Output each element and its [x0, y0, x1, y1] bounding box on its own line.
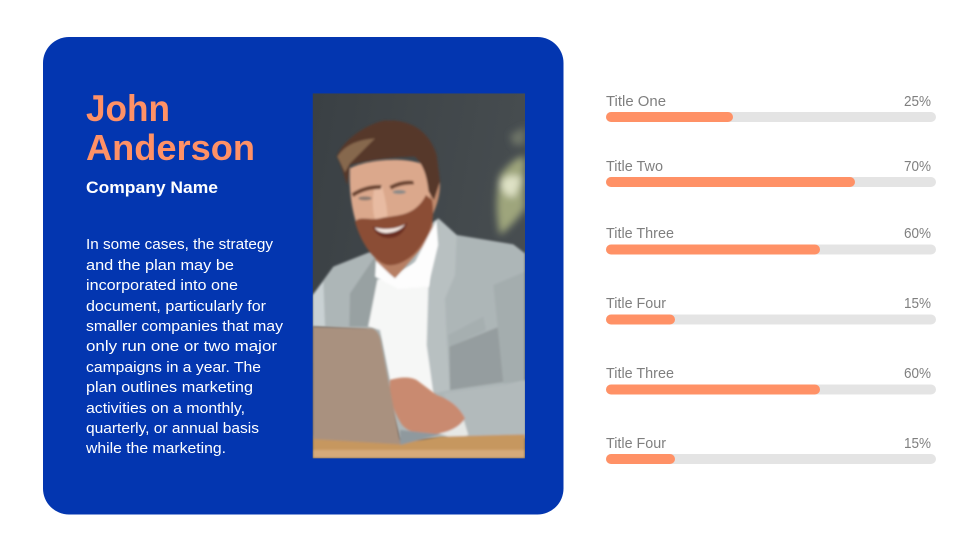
progress row: Title Three: 60% — [904, 225, 931, 242]
progress row: Title Four — [606, 295, 936, 324]
laptop — [313, 327, 401, 444]
progress row: Title Two: 70% — [904, 158, 931, 175]
beard — [355, 195, 433, 265]
hand — [390, 377, 465, 434]
hair — [337, 120, 440, 200]
progress row: Title Two: Title Two — [606, 158, 663, 175]
sleeve — [464, 380, 525, 437]
biography text block: quarterly, or annual basis — [86, 420, 259, 437]
panel: progress bars — [606, 93, 936, 464]
progress row: Title Three (second): Title Three — [606, 365, 674, 382]
biography text block: smaller companies that may — [86, 318, 284, 335]
name heading: John — [86, 88, 170, 129]
table — [312, 433, 525, 452]
biography text block: document, particularly for — [86, 298, 266, 315]
biography text block: In some cases, the strategy — [86, 236, 274, 253]
biography text block — [85, 236, 284, 457]
progress row: Title Three: Title Three — [606, 225, 674, 242]
progress row: Title One: 25% — [904, 93, 931, 110]
progress row: Title Four (second): 15% — [904, 435, 931, 452]
progress row: Title One: Title One — [606, 93, 666, 110]
progress row: Title One — [606, 93, 936, 122]
progress row: Title Four (second): Title Four — [606, 435, 666, 452]
progress row: Title Two — [606, 158, 936, 187]
collar — [375, 220, 438, 289]
biography text block: activities on a monthly, — [86, 400, 245, 417]
progress row: Title Four: Title Four — [606, 295, 666, 312]
name heading: Anderson — [86, 127, 255, 168]
company name: Company Name — [86, 178, 218, 197]
progress row: Title Three (second) — [606, 365, 936, 394]
biography text block: while the marketing. — [85, 440, 226, 457]
face — [348, 158, 432, 222]
biography text block: incorporated into one — [86, 277, 238, 294]
progress row: Title Four: 15% — [904, 295, 931, 312]
name heading — [86, 88, 255, 168]
biography text block: plan outlines marketing — [86, 379, 253, 396]
panel: profile card — [43, 37, 564, 514]
photo: smiling man in grey blazer at laptop — [313, 93, 525, 458]
progress row: Title Four (second) — [606, 435, 936, 464]
brows and eyes — [352, 185, 382, 197]
progress row: Title Three — [606, 225, 936, 254]
biography text block: campaigns in a year. The — [86, 359, 261, 376]
biography text block: only run one or two major — [86, 338, 277, 355]
biography text block: and the plan may be — [86, 257, 234, 274]
neck — [374, 221, 434, 279]
progress row: Title Three (second): 60% — [904, 365, 931, 382]
